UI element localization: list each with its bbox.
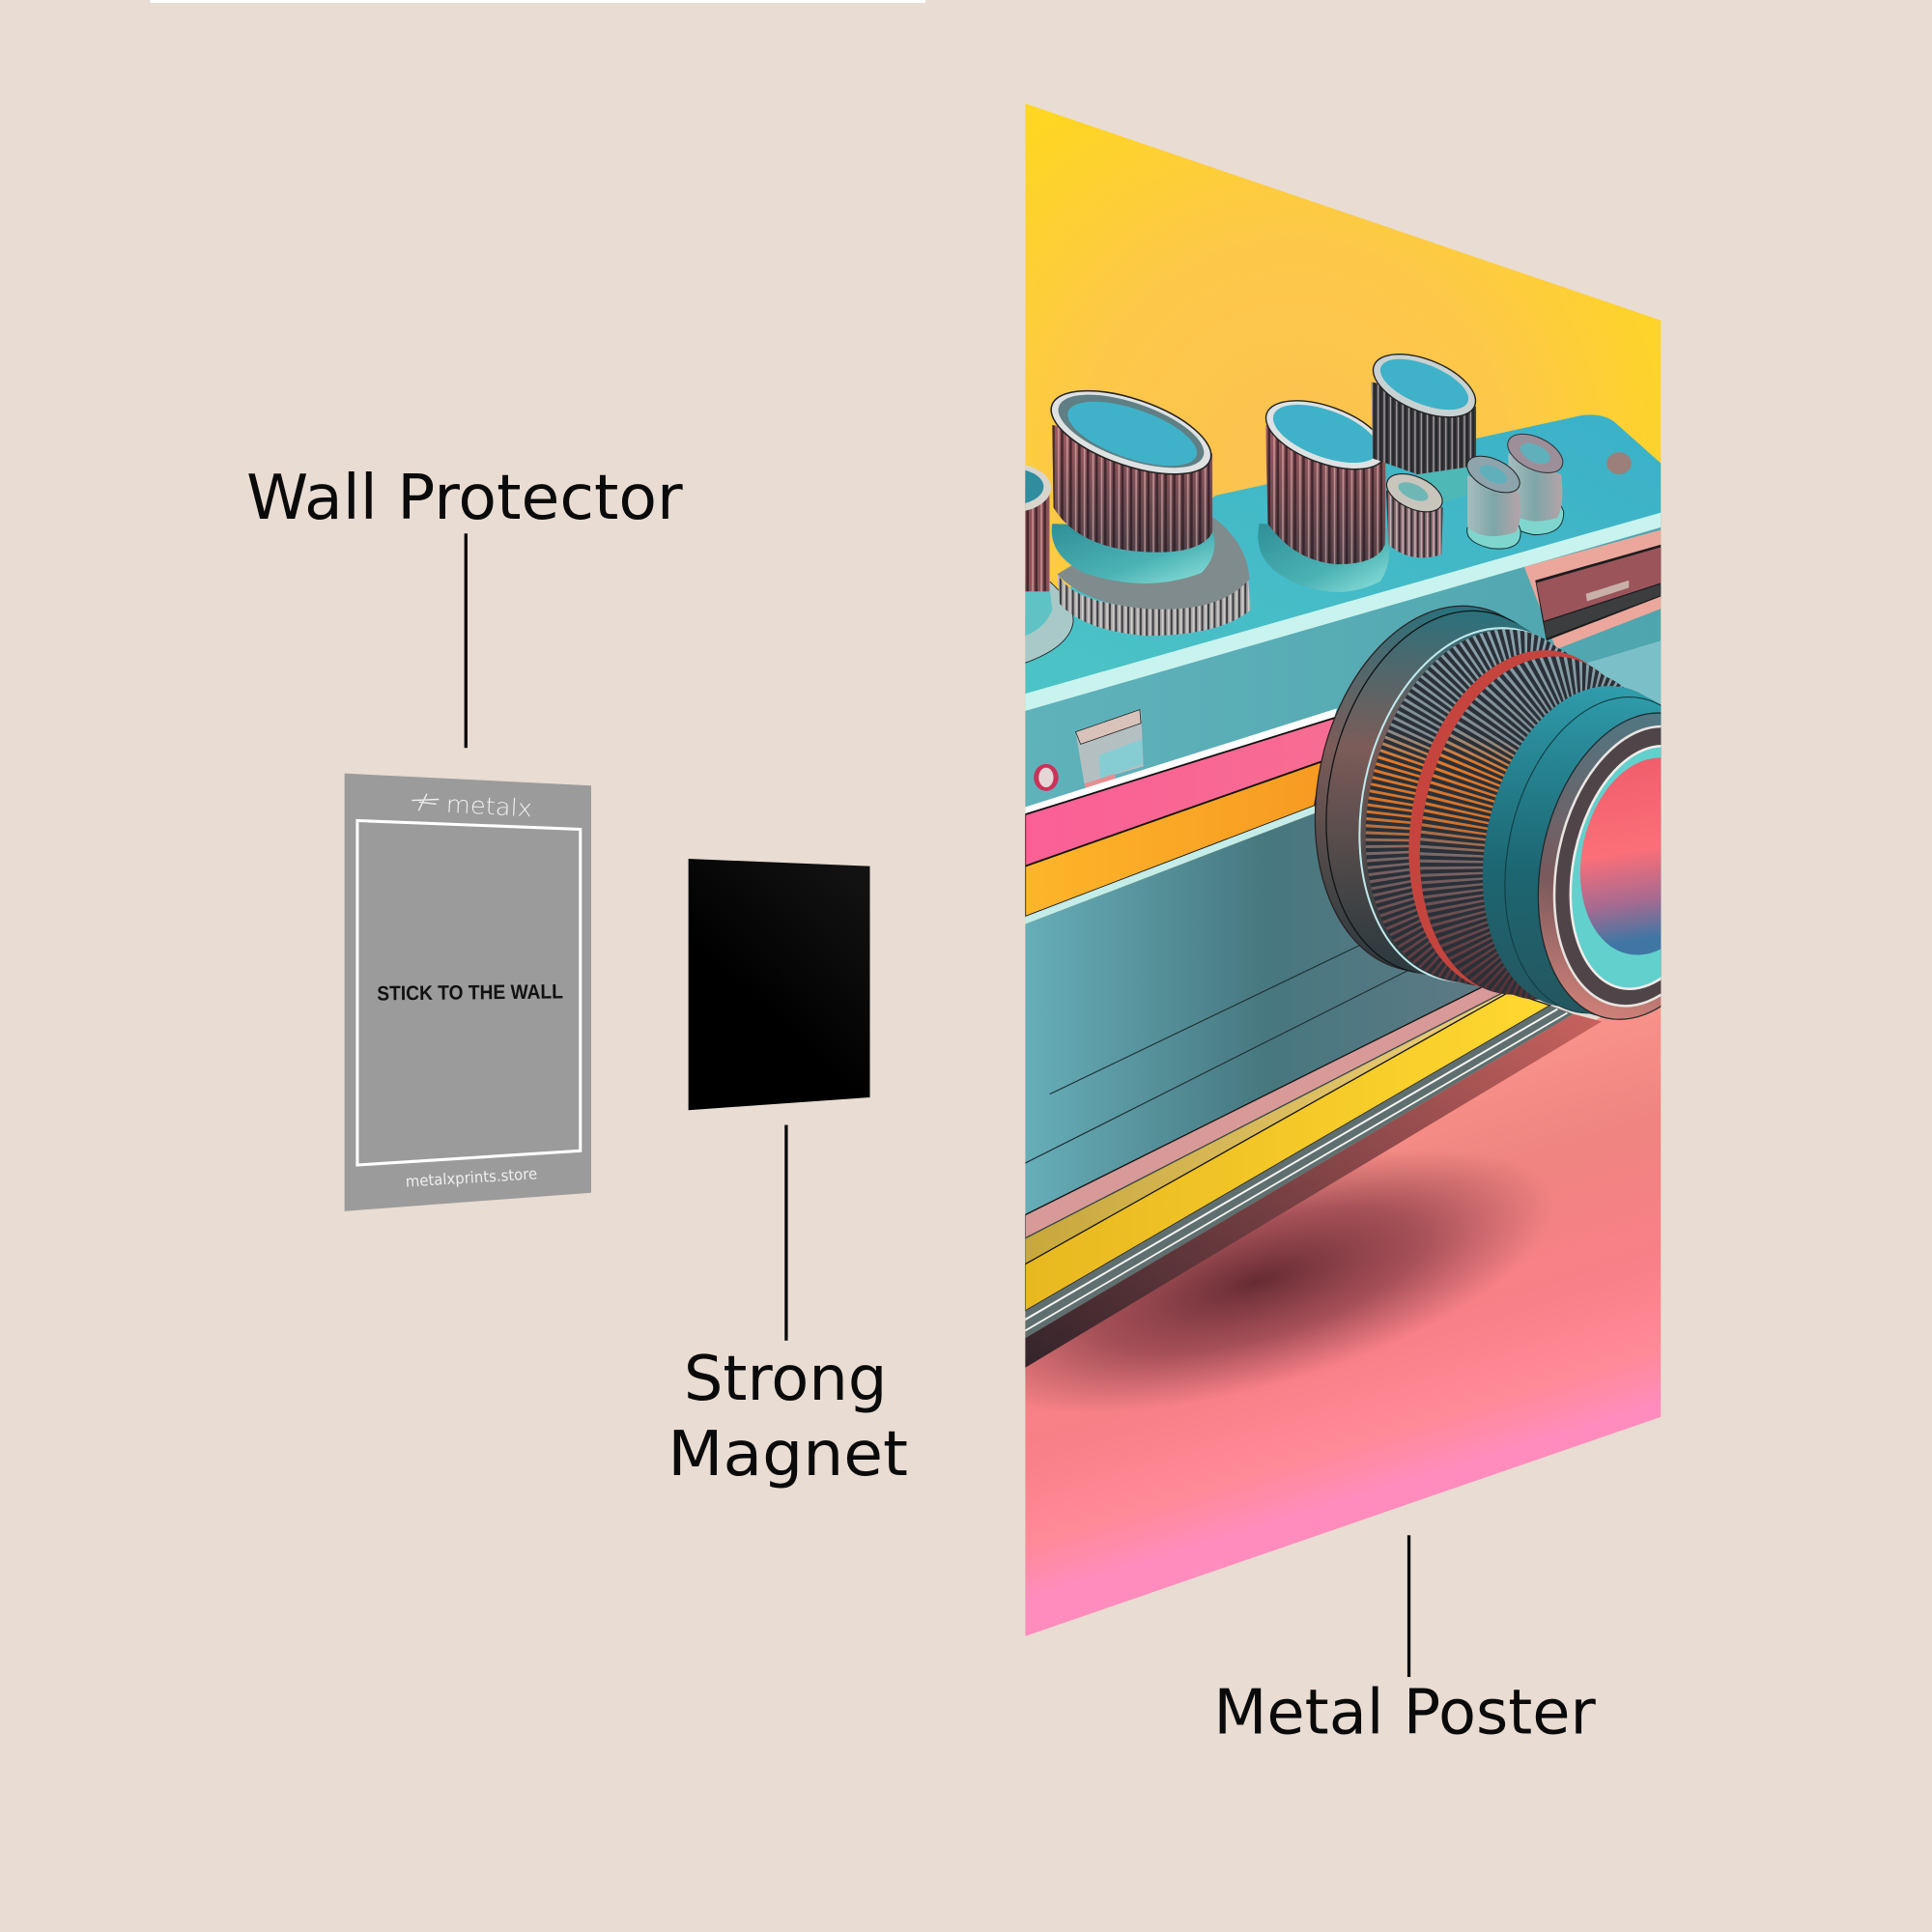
- small ribbed dial: [1385, 473, 1443, 558]
- label: strong magnet: Magnet: [668, 1419, 908, 1491]
- white frame: [357, 820, 581, 1165]
- lens knurled ring: [1366, 630, 1589, 988]
- sheet background: [345, 774, 591, 1211]
- label: strong magnet: [668, 1344, 908, 1491]
- leader line: metal poster: [1407, 1535, 1410, 1677]
- lens teal inner rim: [1569, 745, 1662, 990]
- stick to the wall text: STICK TO THE WALL: [377, 980, 563, 1005]
- back dial: [1372, 354, 1476, 502]
- lens second knurled ring: [1420, 657, 1646, 1007]
- lens front metal ring: [1538, 712, 1662, 1020]
- label: wall protector: Wall Protector: [246, 463, 683, 534]
- camera colour stripes: [1025, 708, 1337, 924]
- second dial: [1258, 400, 1389, 592]
- leader line: wall protector: [465, 533, 468, 748]
- label: strong magnet: Strong: [684, 1344, 887, 1415]
- metalx logo: metalx: [445, 791, 533, 822]
- camera front body: [1025, 513, 1661, 814]
- leader line: strong magnet: [784, 1125, 788, 1341]
- viewfinder window: [1524, 529, 1661, 649]
- lens teal barrel: [1482, 686, 1662, 1016]
- small pill buttons: [1462, 426, 1632, 549]
- store url: metalxprints.store: [405, 1164, 538, 1191]
- camera top plate: [1025, 414, 1661, 705]
- lens rear flange: [1314, 605, 1540, 982]
- left partial dial: [1025, 465, 1074, 664]
- lens glass: [1580, 757, 1662, 954]
- poster pink floor: [1025, 997, 1662, 1636]
- panel: wall protector sheet: [345, 774, 591, 1211]
- panel: metal poster: [1025, 103, 1662, 1636]
- lens red band: [1408, 650, 1605, 995]
- big dial: [1041, 374, 1251, 636]
- shutter switch: [1034, 710, 1144, 791]
- camera lower body: [1025, 813, 1509, 1215]
- metalx logo: [411, 789, 533, 822]
- camera bottom stripes: [1025, 982, 1602, 1368]
- camera lens: [1314, 605, 1662, 1020]
- label: metal poster: Metal Poster: [1213, 1678, 1597, 1749]
- panel: strong magnet: [689, 859, 870, 1110]
- poster yellow backdrop: [1025, 103, 1661, 966]
